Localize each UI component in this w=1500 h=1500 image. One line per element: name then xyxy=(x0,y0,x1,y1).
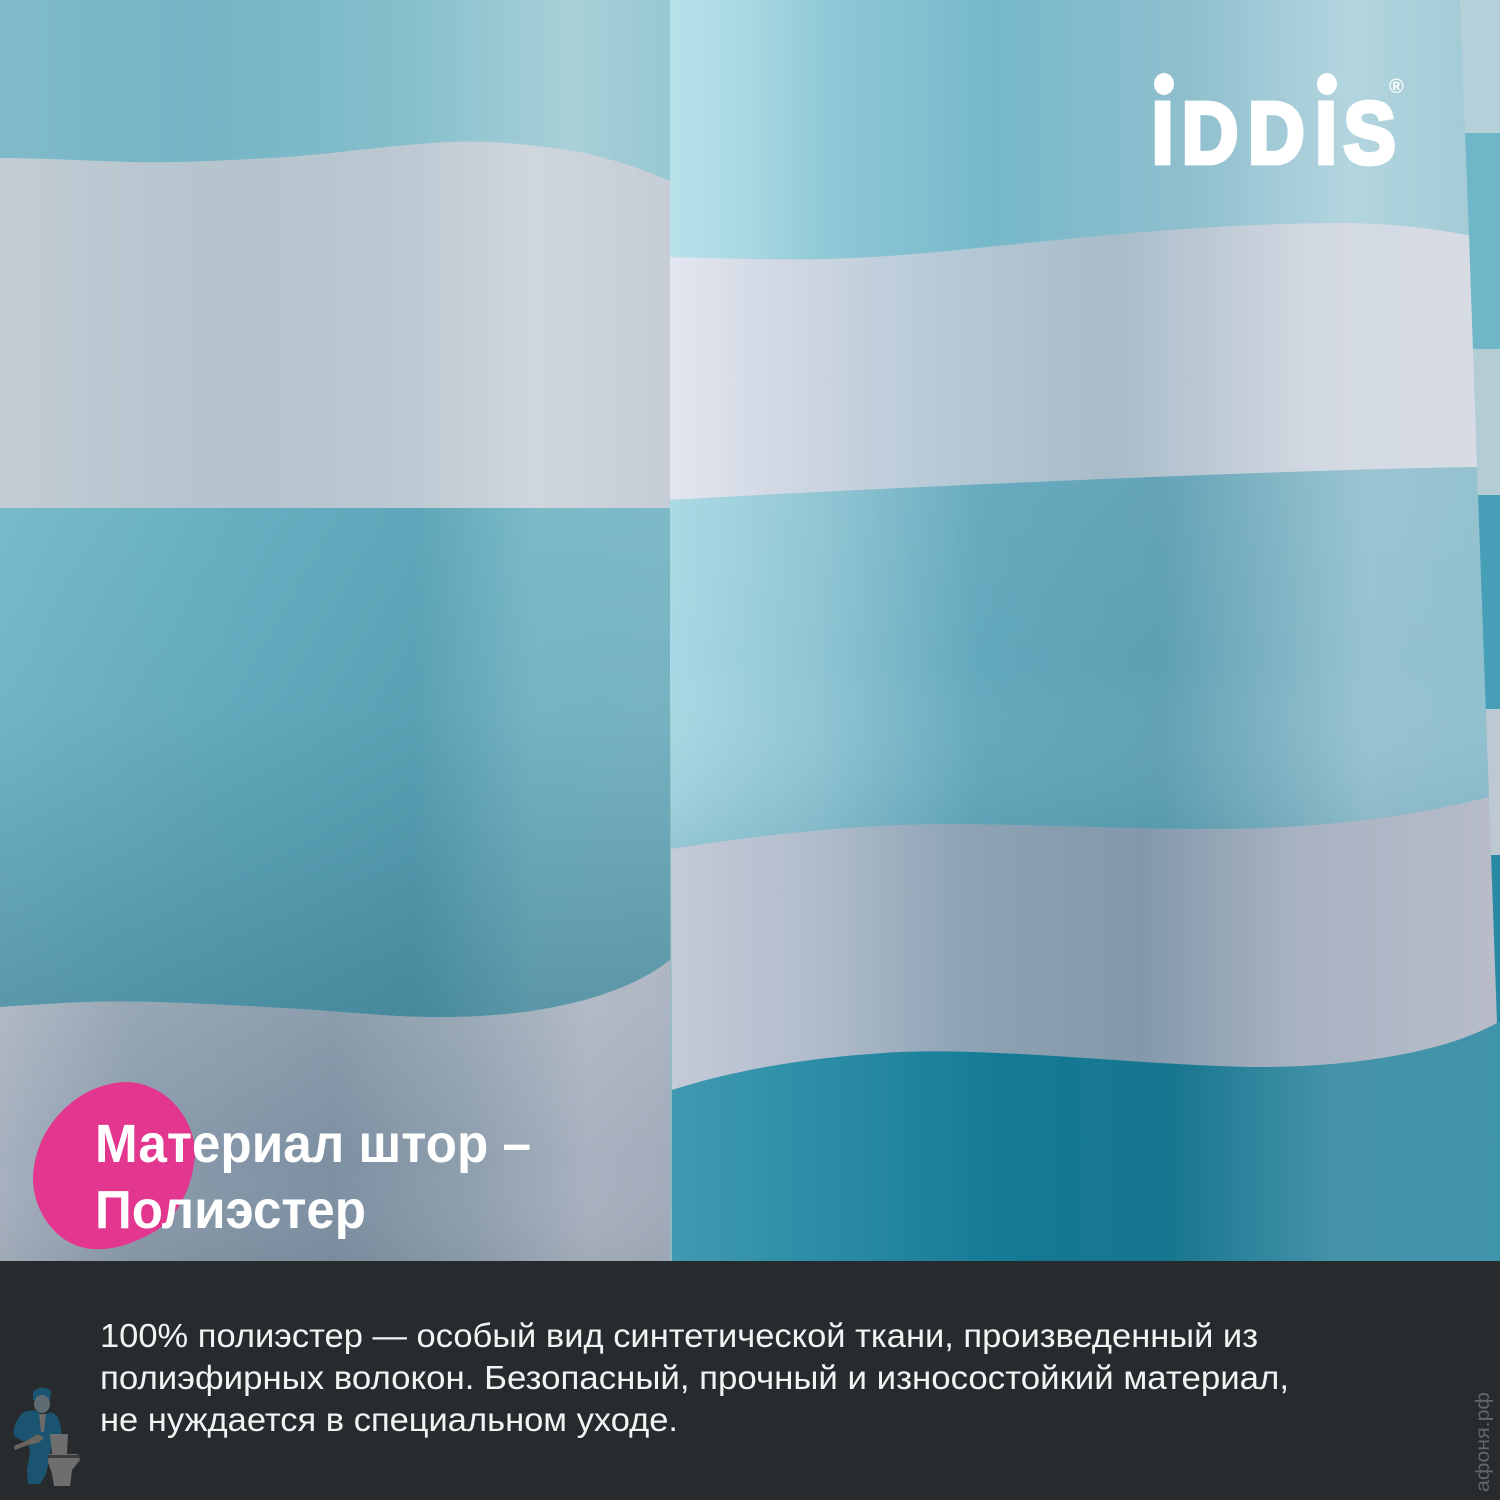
logo wordmark: IDDIS xyxy=(1152,84,1396,182)
description text xyxy=(100,1317,1289,1438)
logo registered mark: ® xyxy=(1389,76,1404,98)
watermark: афоня.рф xyxy=(1473,1392,1494,1492)
description text: полиэфирных волокон. Безопасный, прочный и износостойкий материал, xyxy=(100,1359,1289,1396)
logo dots xyxy=(1154,73,1337,95)
far right curtain fold stripes xyxy=(1455,0,1500,1262)
left curtain fold stripes xyxy=(0,0,670,1262)
title xyxy=(95,1114,531,1240)
right curtain fold stripes xyxy=(669,0,1500,1262)
title: Полиэстер xyxy=(95,1180,366,1240)
bottom dark panel xyxy=(0,1261,1500,1500)
icon: plumber with toilet xyxy=(14,1388,80,1486)
description text: 100% полиэстер — особый вид синтетической ткани, произведенный из xyxy=(100,1317,1258,1354)
pink blob accent xyxy=(33,1082,195,1249)
logo: IDDIS xyxy=(1152,73,1404,182)
title: Материал штор – xyxy=(95,1114,531,1174)
description text: не нуждается в специальном уходе. xyxy=(100,1401,678,1438)
